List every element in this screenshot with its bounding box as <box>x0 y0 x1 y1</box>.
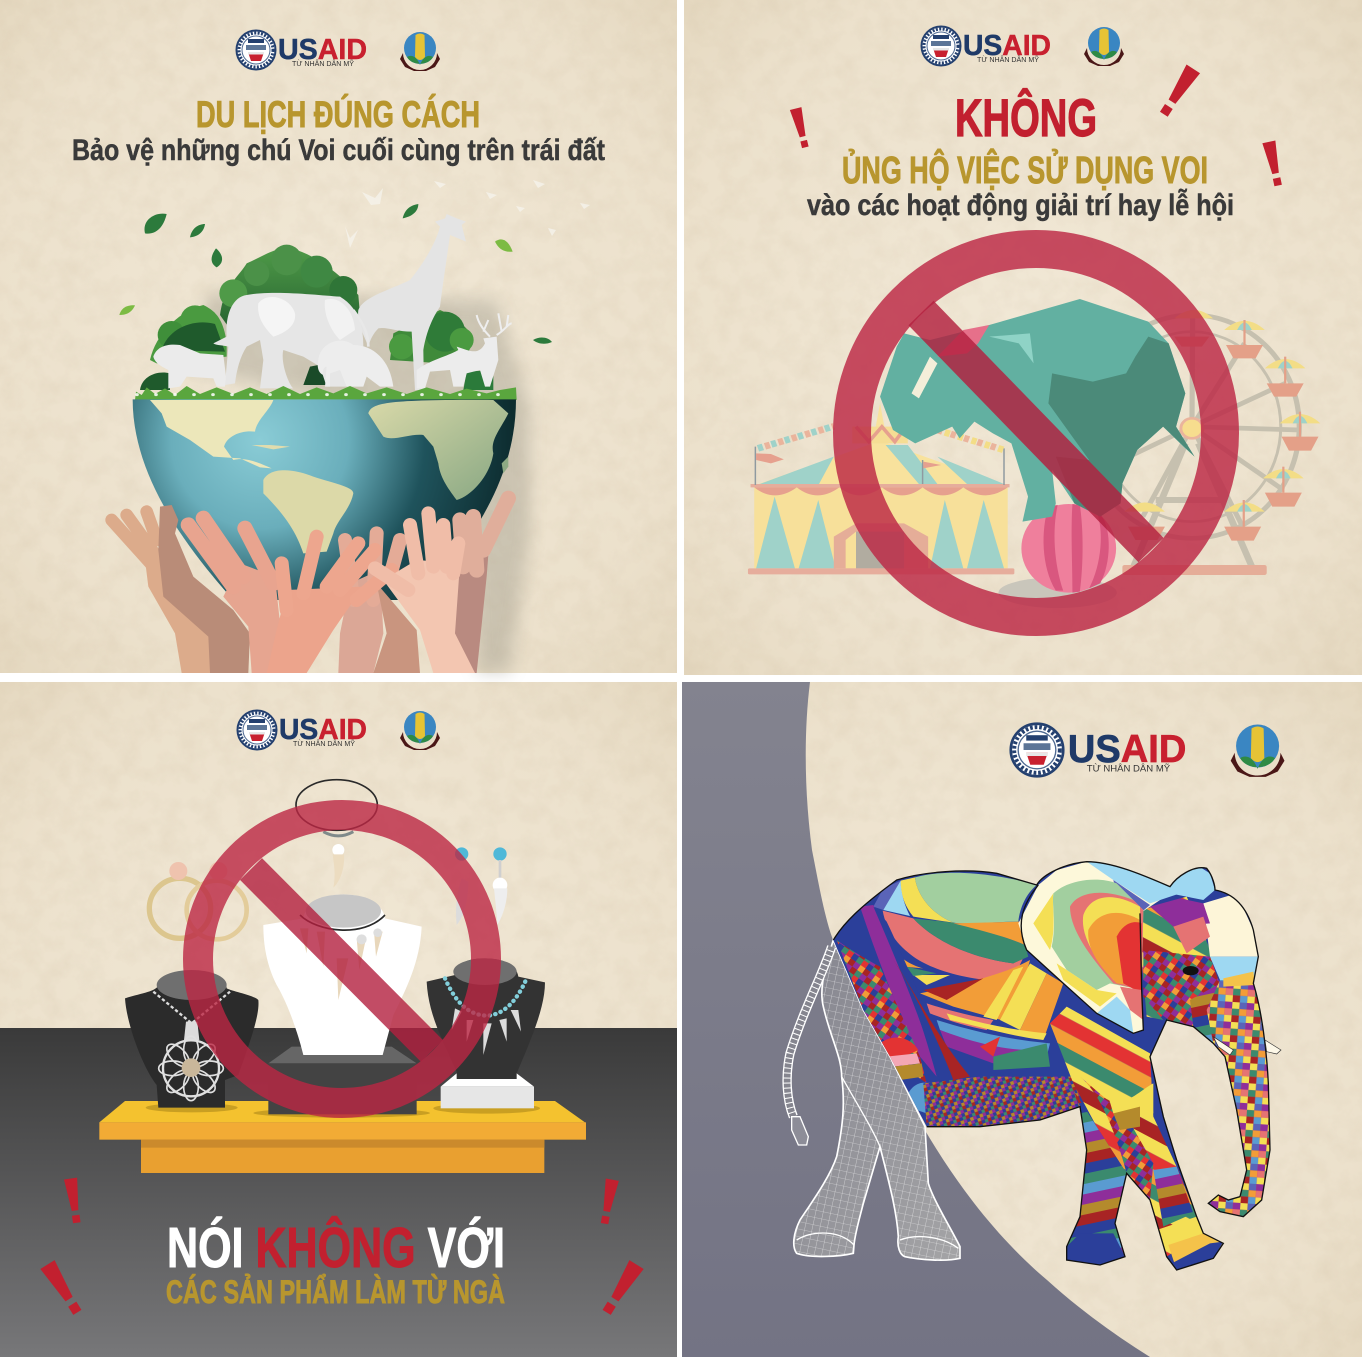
illustration: hands holding globe with animals <box>112 204 530 673</box>
icon: exclamation marks <box>40 1178 644 1317</box>
head <box>1142 897 1213 1023</box>
rings <box>149 862 247 939</box>
trees <box>140 245 493 390</box>
paper butterflies <box>345 180 590 248</box>
ear outline <box>1021 885 1143 1033</box>
panel: no ivory products <box>0 710 677 1357</box>
prohibition sign <box>198 815 486 1103</box>
panel: no elephant entertainment <box>748 26 1320 617</box>
tooth necklace <box>296 780 377 888</box>
logo: USAID and partner emblem: USAID <box>963 30 1051 62</box>
ear <box>1018 862 1170 1033</box>
prohibition sign <box>852 249 1220 617</box>
dark floor <box>0 1028 677 1357</box>
hand <box>447 498 508 673</box>
soft shadow <box>183 293 530 673</box>
elephant outline <box>833 862 1270 1270</box>
logo: USAID and partner emblem: USAID <box>278 34 367 66</box>
shelf <box>99 1101 586 1173</box>
tusks <box>1213 1037 1281 1055</box>
eye <box>1183 966 1199 975</box>
logo: USAID and partner emblem: TỪ NHÂN DÂN MỸ <box>977 55 1039 64</box>
logo: USAID and partner emblem <box>236 30 440 71</box>
hand <box>112 512 210 673</box>
subheading: vào các hoạt động giải trí hay lễ hội <box>807 188 1234 222</box>
illustration: half-coloured elephant <box>780 850 1300 1280</box>
title: DU LỊCH ĐÚNG CÁCH <box>196 93 480 135</box>
teal elephant <box>880 299 1195 522</box>
logo: USAID and partner emblem <box>922 26 1124 66</box>
center bust with tusk necklace <box>263 894 422 1114</box>
globe <box>133 399 516 600</box>
left bust with medallion <box>125 970 259 1108</box>
circus tent <box>748 403 1014 574</box>
white line-art hindquarters and tail <box>787 940 960 1260</box>
ferris wheel <box>1085 310 1320 575</box>
leaves <box>119 204 513 315</box>
hand <box>188 518 280 673</box>
logo: USAID and partner emblem: TỪ NHÂN DÂN MỸ <box>293 739 355 748</box>
illustration: ivory jewellery display <box>99 780 586 1173</box>
panel: colourful elephant <box>682 682 1300 1357</box>
subheading: CÁC SẢN PHẨM LÀM TỪ NGÀ <box>166 1274 505 1310</box>
paper animals <box>153 214 512 390</box>
logo: USAID and partner emblem: USAID <box>279 714 367 746</box>
icon: exclamation marks <box>790 65 1285 187</box>
coloured elephant body <box>834 862 1270 1270</box>
hand <box>375 513 475 673</box>
hand <box>158 505 250 673</box>
logo: USAID and partner emblem: TỪ NHÂN DÂN MỸ <box>292 59 354 68</box>
right bust with box <box>427 958 545 1108</box>
front leg <box>1050 1007 1203 1257</box>
circus ball <box>1021 504 1116 593</box>
hand <box>267 537 392 673</box>
heading line: ỦNG HỘ VIỆC SỬ DỤNG VOI <box>842 147 1208 192</box>
logo: USAID and partner emblem: USAID <box>1068 728 1186 771</box>
trunk <box>1207 980 1270 1217</box>
logo: USAID and partner emblem <box>1011 724 1284 777</box>
heading: KHÔNG: KHÔNG <box>955 87 1097 148</box>
logo: USAID and partner emblem <box>238 710 440 750</box>
illustration: circus with elephant on ball <box>748 299 1320 608</box>
leaf <box>533 338 552 344</box>
grass <box>135 386 517 400</box>
earrings <box>455 847 507 925</box>
hand <box>338 533 420 673</box>
heading: NÓI KHÔNG VỚI <box>167 1215 505 1280</box>
logo: USAID and partner emblem: TỪ NHÂN DÂN MỸ <box>1087 763 1171 774</box>
panel: responsible tourism <box>72 30 605 673</box>
subtitle: Bảo vệ những chú Voi cuối cùng trên trái đất <box>72 134 605 167</box>
gray curved background <box>682 682 1150 1357</box>
ball shadow <box>998 577 1117 608</box>
